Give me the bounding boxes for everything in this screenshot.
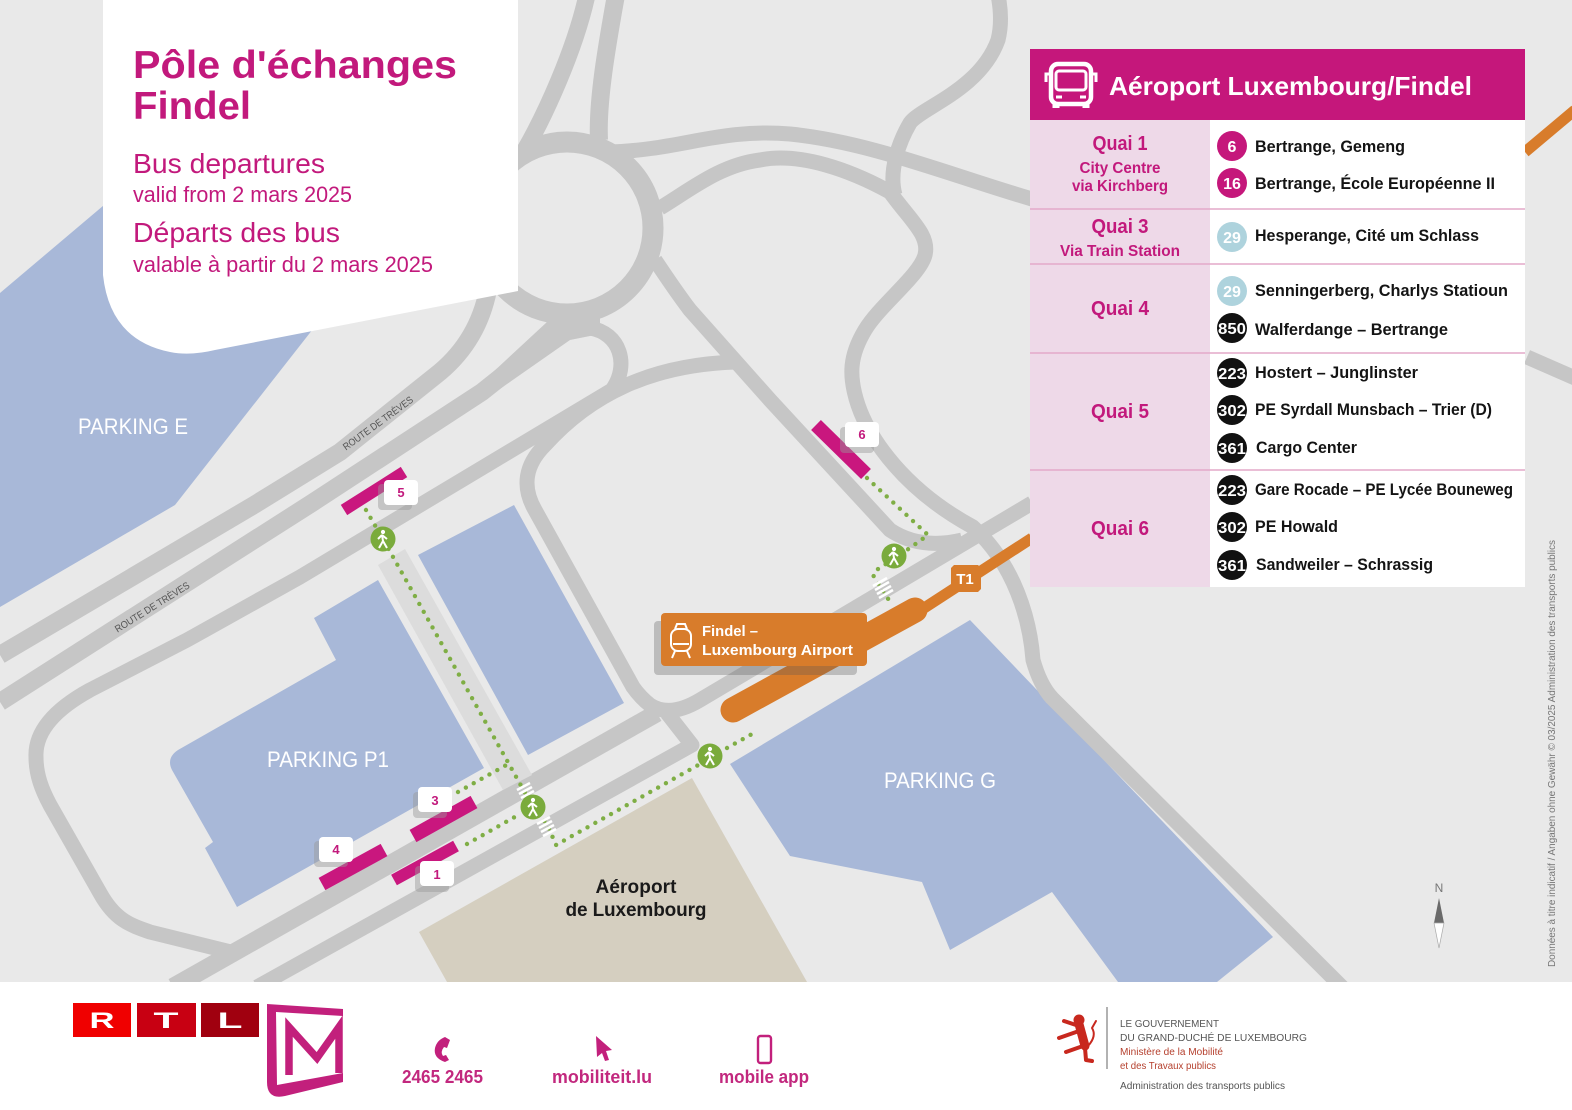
logo: mobiliteit M [267,1004,343,1097]
row: quai 5: Quai 5 [1091,401,1149,423]
logo: RTL: R [90,1008,115,1033]
map: bus stop quai 5 [344,472,418,510]
map: parking labels: PARKING P1 [267,747,389,772]
map: bus stop quai 3: 3 [431,793,439,808]
tram stop label: Luxembourg Airport [702,642,853,659]
row: quai 4: 850 [1218,321,1246,338]
map: airport label [566,877,706,921]
icon: phone [435,1037,450,1062]
row: quai 5: Cargo Center [1256,438,1357,457]
contact: website: mobiliteit.lu [552,1067,652,1087]
map: airport label: Aéroport [596,877,677,898]
icon: pedestrian near quai 5 [370,526,396,552]
icon: north arrow [1434,881,1444,948]
row: quai 3: Quai 3 [1092,216,1148,238]
logo: government of Luxembourg: DU GRAND-DUCHÉ DE LUXEMBOURG [1120,1031,1307,1044]
row: quai 6: PE Howald [1255,517,1338,536]
row: quai 1: Bertrange, École Européenne II [1255,174,1495,193]
logo: government of Luxembourg: et des Travaux publics [1120,1061,1216,1072]
map: parking labels: PARKING G [884,768,996,793]
contact: mobile app [719,1036,809,1087]
logo: RTL: L [218,1008,242,1033]
row: quai 1: City Centre [1080,160,1161,177]
map: parking labels: PARKING E [78,414,188,439]
panel: departures table [1030,49,1525,587]
contact: phone [402,1037,483,1087]
logo: RTL [73,1003,259,1037]
row: quai 1: via Kirchberg [1072,178,1168,195]
logo: government of Luxembourg: Administration des transports publics [1120,1081,1285,1092]
icon: pedestrian near quai 6 [882,544,906,568]
table header [1030,49,1525,120]
row: quai 5 [1091,358,1492,463]
map: parking labels [78,414,996,793]
map: bus stop quai 5: 5 [397,485,405,500]
tram stop label [654,613,867,675]
row: quai 1: Bertrange, Gemeng [1255,137,1405,156]
row: quai 6: Quai 6 [1091,518,1149,540]
map: tram line badge T1 [951,565,981,592]
row: quai 6: 223 [1218,483,1246,500]
table header: Aéroport Luxembourg/Findel [1109,71,1472,101]
map: zebra crossings [517,578,893,836]
map: bus stop quai 4: 4 [332,842,340,857]
title: Findel [133,85,251,128]
icon: pedestrian near airport [698,744,722,768]
logo: government of Luxembourg [1059,1007,1307,1092]
row: quai 1: Quai 1 [1092,133,1148,155]
map: pedestrian walkway [378,549,532,790]
contact: website [552,1036,652,1087]
row: quai 6: 361 [1218,558,1246,575]
row: quai 3 [1060,216,1479,260]
map: tram line badge T1: T1 [956,571,974,588]
row: quai 4: Quai 4 [1091,298,1150,320]
row: quai 4: 29 [1223,284,1241,301]
row: quai 3: Via Train Station [1060,243,1180,260]
row: quai 5: 223 [1218,366,1246,383]
icon: north arrow: N [1435,881,1443,895]
row: quai 1 [1072,131,1495,198]
row: quai 6: Gare Rocade – PE Lycée Bouneweg [1255,480,1513,499]
row: quai 5: 302 [1218,403,1246,420]
tram stop label: Findel – [702,623,758,640]
row: quai 3: 29 [1223,230,1241,247]
row: quai 4 [1091,276,1508,343]
map: road labels [112,393,416,635]
subtitle: English: valid from 2 mars 2025 [133,182,352,207]
map: bus stop quai 4 [314,837,384,884]
subtitle: French: Départs des bus [133,217,340,248]
title: Pôle d'échanges [133,44,457,87]
map: bus stop quai 6 [816,422,879,474]
row: quai 4: Walferdange – Bertrange [1255,320,1448,339]
subtitle: French: valable à partir du 2 mars 2025 [133,252,433,277]
icon: pedestrian near quai 1 and 3 [520,794,546,820]
icon: bus [1046,64,1096,108]
map: bus stop quai 1 [394,846,456,892]
logo: RTL: T [154,1008,180,1033]
map: airport label: de Luxembourg [566,900,706,921]
icon: smartphone [758,1036,771,1063]
logo: government of Luxembourg: LE GOUVERNEMENT [1120,1019,1219,1030]
row: quai 5: 361 [1218,441,1246,458]
subtitle: English: Bus departures [133,148,325,179]
row: quai 6 [1091,475,1513,580]
row: quai 1: 6 [1228,139,1237,156]
map: tram line T1 [733,110,1572,710]
map: bus stop quai 1: 1 [433,867,441,882]
icon: red lion [1059,1014,1096,1061]
icon: cursor [596,1036,612,1061]
footer background [0,982,1572,1110]
row: quai 4: Senningerberg, Charlys Statioun [1255,281,1508,300]
map: pedestrian paths [366,478,928,845]
contact: mobile app: mobile app [719,1067,809,1087]
row: quai 6: Sandweiler – Schrassig [1256,555,1433,574]
map: parking areas and airport [0,200,1273,982]
map: bus stop quai 6: 6 [858,427,866,442]
title panel [103,0,518,354]
logo: government of Luxembourg: Ministère de la Mobilité [1120,1047,1223,1058]
map: road labels: ROUTE DE TRÈVES [112,579,192,635]
map: bus stop quai 3 [413,787,474,836]
row: quai 6: 302 [1218,520,1246,537]
disclaimer text: Données à titre indicatif / Angaben ohne Gewähr © 03/2025 Administration des transports publics [1546,540,1558,967]
row: quai 5: PE Syrdall Munsbach – Trier (D) [1255,400,1492,419]
row: quai 5: Hostert – Junglinster [1255,363,1418,382]
icon: tram [671,624,691,658]
row: quai 3: Hesperange, Cité um Schlass [1255,226,1479,245]
row: quai 1: 16 [1223,176,1241,193]
contact: phone: 2465 2465 [402,1067,483,1087]
map: road labels: ROUTE DE TRÈVES [340,393,416,453]
